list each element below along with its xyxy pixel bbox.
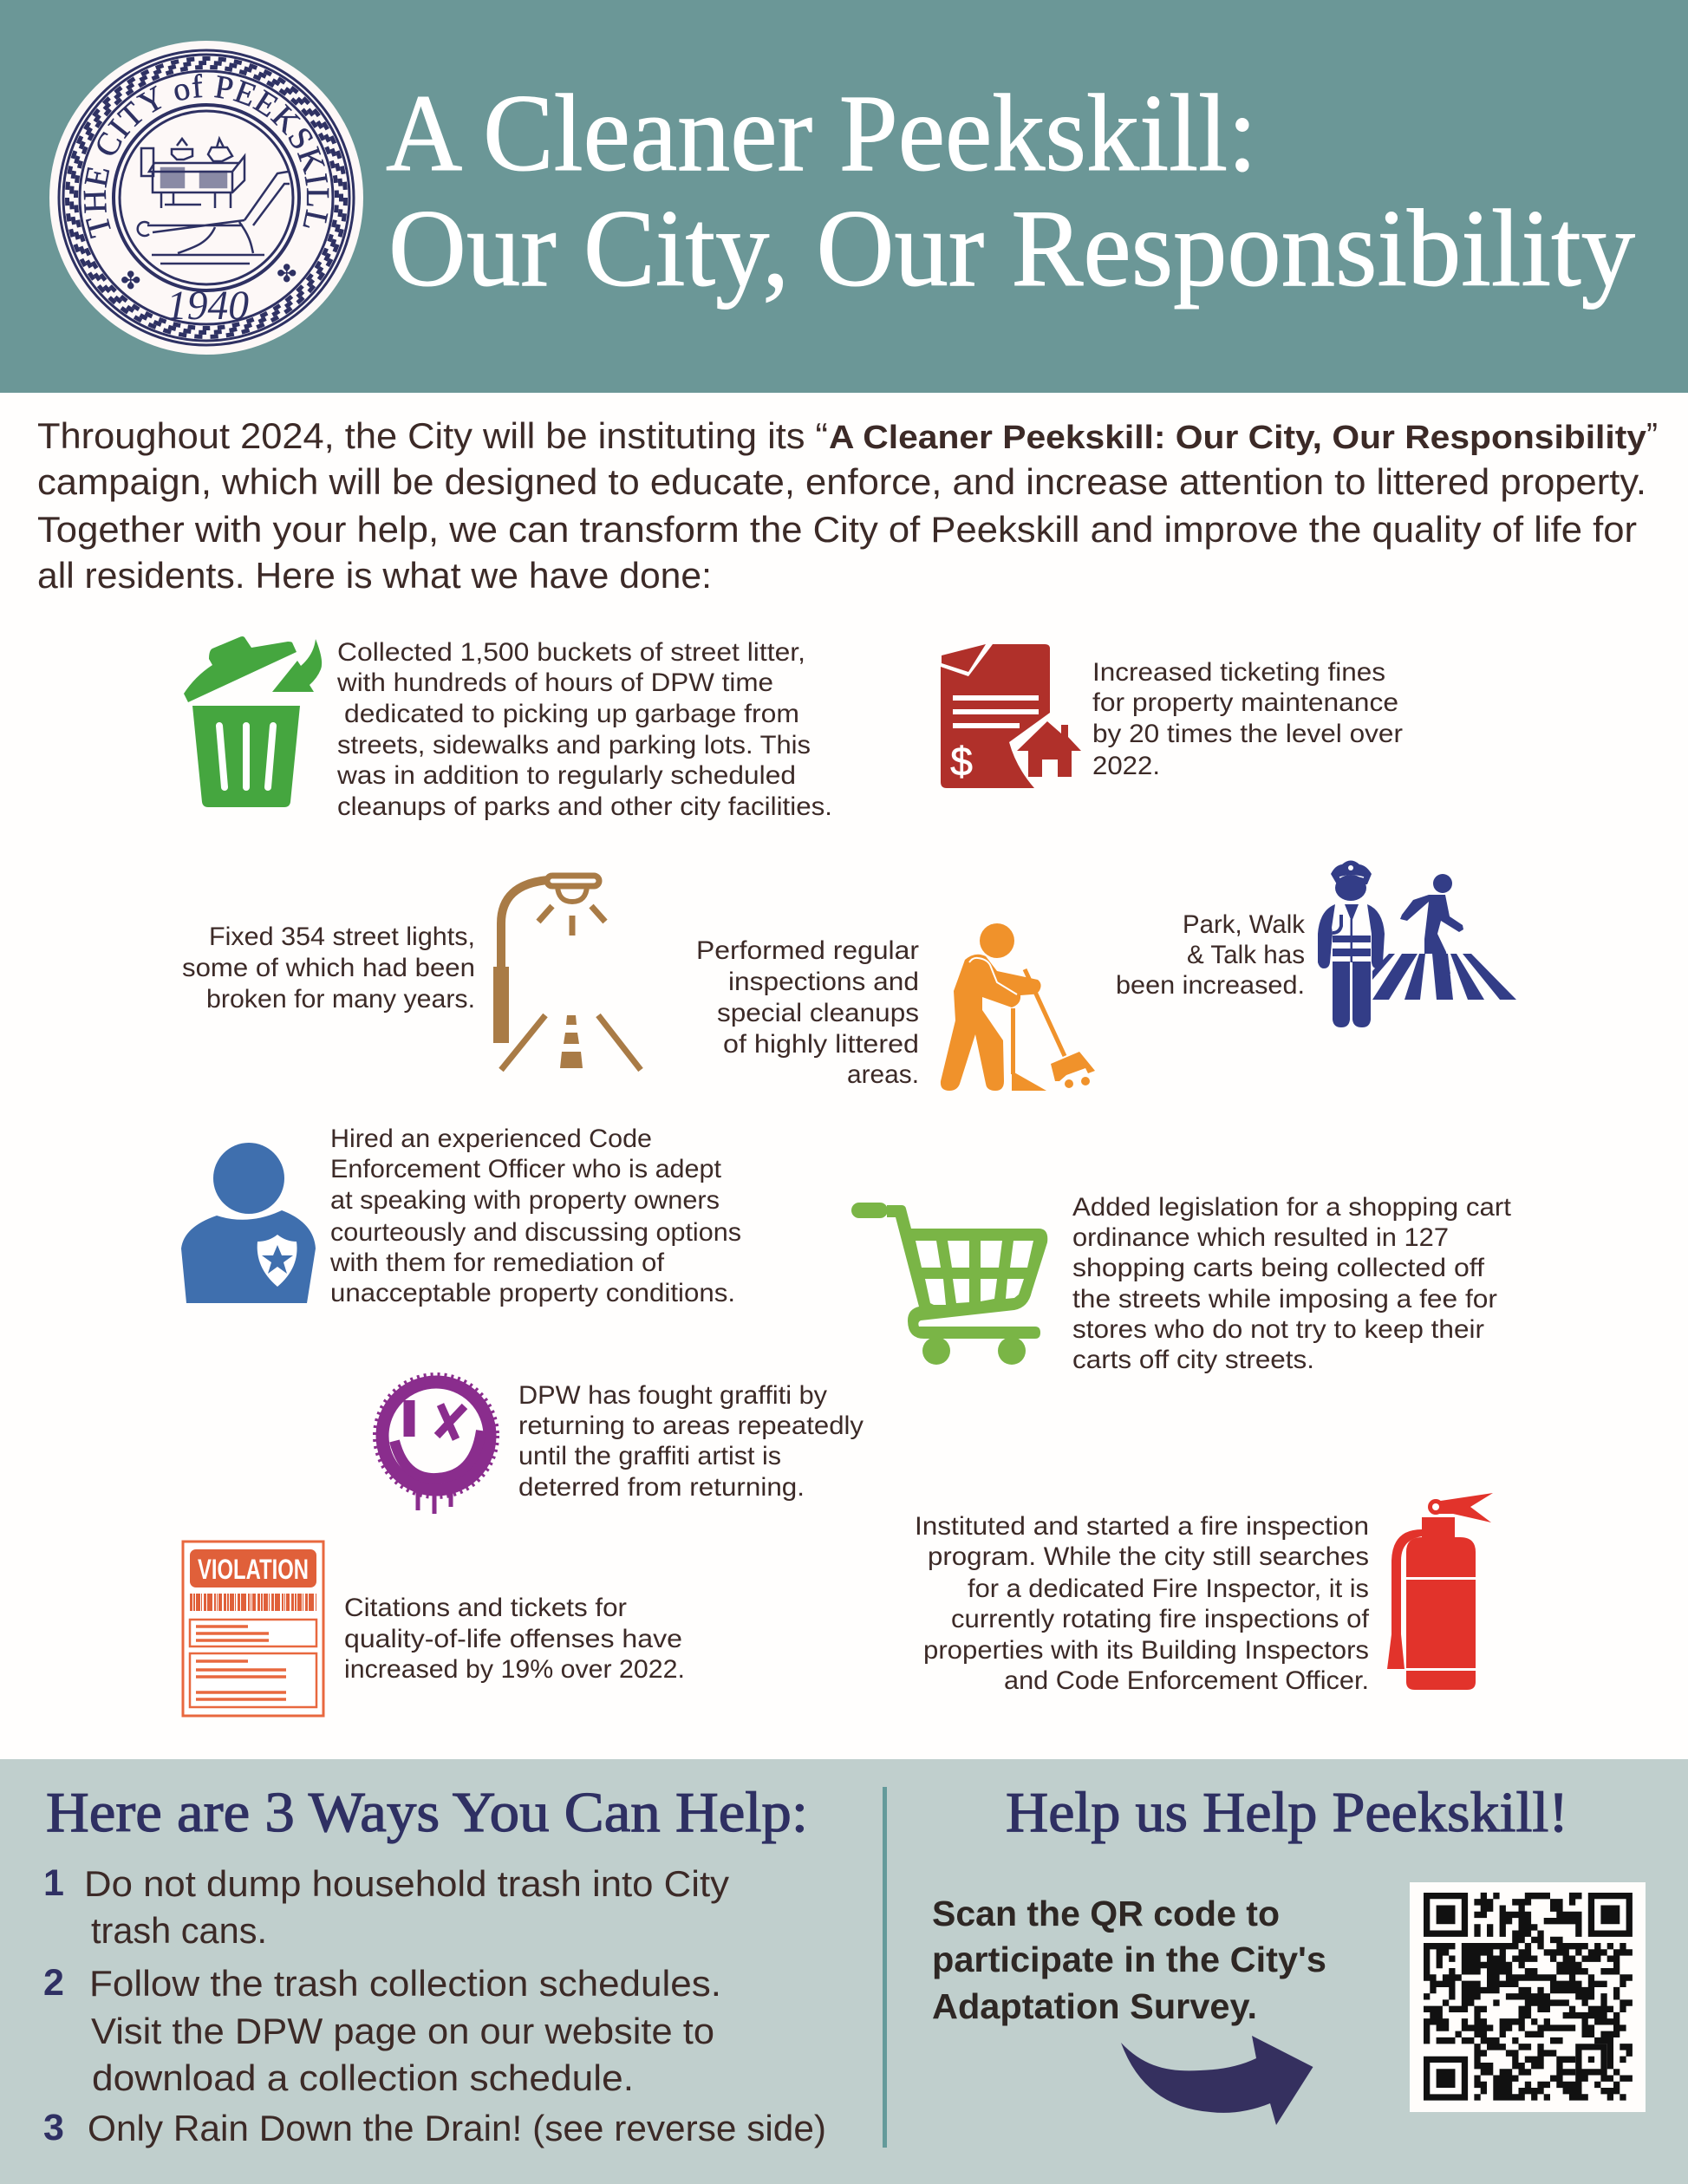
text: inspections and cleanups: of highly littered: [723, 1030, 919, 1059]
text: street litter: [336, 638, 832, 821]
text: park walk and talk: & Talk has: [1187, 941, 1305, 969]
icon: street lamp and road: [493, 876, 641, 1070]
list: ways to help: Do not dump household trash into City: [84, 1863, 729, 1904]
icon: city seal: [49, 41, 363, 355]
title: [386, 73, 1635, 310]
text: fire inspection: currently rotating fire inspections of: [951, 1605, 1370, 1633]
text: fire inspection: for a dedicated Fire Inspector, it is: [968, 1574, 1369, 1603]
icon: person sweeping: [941, 923, 1095, 1091]
text: ticketing fines: by 20 times the level over: [1092, 720, 1403, 748]
text: park walk and talk: [1116, 910, 1306, 1000]
text: street lights: broken for many years.: [206, 985, 475, 1014]
icon: police officer and crosswalk: [1318, 860, 1516, 1027]
icon: city seal: 1940: [166, 283, 249, 329]
text: scan the QR code: Adaptation Survey.: [932, 1986, 1257, 2026]
text: citations and tickets: Citations and tickets for: [344, 1594, 627, 1622]
text: graffiti: [518, 1381, 864, 1502]
text: fire inspection: properties with its Building Inspectors: [923, 1636, 1369, 1665]
text: street litter: Collected 1,500 buckets of street litter,: [337, 638, 805, 667]
icon: shopping cart: [851, 1203, 1047, 1365]
list: ways to help: Visit the DPW page on our website to: [91, 2011, 714, 2051]
text: inspections and cleanups: [696, 936, 919, 1089]
text: park walk and talk: been increased.: [1116, 971, 1305, 1000]
list: ways to help: Only Rain Down the Drain! (see reverse side): [88, 2108, 826, 2148]
text: inspections and cleanups: special cleanups: [717, 999, 919, 1027]
text: code enforcement officer: at speaking with property owners: [330, 1186, 720, 1215]
text: street litter: dedicated to picking up garbage from: [344, 700, 799, 728]
text: code enforcement officer: unacceptable property conditions.: [330, 1279, 735, 1307]
icon: fire extinguisher: [1387, 1493, 1493, 1690]
heading: help us help Peekskill: Help us Help Peekskill!: [1006, 1781, 1568, 1844]
text: inspections and cleanups: Performed regular: [696, 936, 919, 965]
icon: red fine document with house: $: [950, 739, 973, 784]
title: Our City, Our Responsibility: [388, 188, 1635, 310]
list: ways to help: 2: [43, 1962, 64, 2004]
icon: city seal: THE CITY of PEEKSKILL: [83, 74, 329, 239]
text: ticketing fines: [1092, 658, 1403, 780]
text: street litter: streets, sidewalks and parking lots. This: [337, 731, 811, 760]
text: shopping cart ordinance: Added legislation for a shopping cart: [1072, 1193, 1512, 1222]
text: graffiti: returning to areas repeatedly: [518, 1411, 864, 1440]
text: shopping cart ordinance: the streets while imposing a fee for: [1072, 1285, 1497, 1314]
list: ways to help: [43, 1862, 826, 2148]
text: street lights: [182, 922, 475, 1014]
text: inspections and cleanups: inspections and: [728, 968, 919, 996]
title: A Cleaner Peekskill:: [386, 73, 1257, 194]
list: ways to help: Follow the trash collection schedules.: [89, 1963, 721, 2004]
intro text block: campaign, which will be designed to educate, enforce, and increase attention to littered property.: [37, 461, 1646, 502]
icon: city seal: ✤: [277, 260, 297, 287]
text: fire inspection: program. While the city still searches: [928, 1542, 1369, 1571]
list: ways to help: 1: [43, 1862, 64, 1904]
icon: violation ticket: VIOLATION: [198, 1554, 309, 1585]
arrow: [1121, 2036, 1313, 2125]
heading: 3 ways you can help: Here are 3 Ways You Can Help:: [46, 1781, 808, 1844]
intro text block: ”: [1646, 415, 1658, 456]
text: ticketing fines: 2022.: [1092, 752, 1160, 780]
intro text block: A Cleaner Peekskill: Our City, Our Responsibility: [829, 420, 1646, 456]
panel: header banner: [0, 0, 1688, 393]
list: ways to help: 3: [43, 2107, 64, 2148]
icon: red fine document with house: [941, 644, 1081, 788]
text: graffiti: DPW has fought graffiti by: [518, 1381, 827, 1410]
text: street litter: cleanups of parks and other city facilities.: [337, 792, 832, 821]
text: code enforcement officer: [329, 1125, 741, 1307]
text: code enforcement officer: Hired an experienced Code: [330, 1125, 652, 1153]
text: fire inspection: and Code Enforcement Officer.: [1004, 1666, 1369, 1695]
text: fire inspection: [915, 1512, 1370, 1695]
text: graffiti: until the graffiti artist is: [518, 1442, 781, 1470]
intro text block: Together with your help, we can transform the City of Peekskill and improve the quality of life for: [37, 509, 1637, 550]
list: ways to help: trash cans.: [91, 1910, 267, 1951]
text: shopping cart ordinance: [1072, 1193, 1512, 1374]
intro text block: all residents. Here is what we have done:: [37, 555, 712, 596]
text: code enforcement officer: courteously and discussing options: [330, 1218, 741, 1247]
text: citations and tickets: quality-of-life offenses have: [344, 1625, 682, 1653]
intro text block: Throughout 2024, the City will be instituting its “: [37, 415, 828, 456]
text: graffiti: deterred from returning.: [518, 1473, 805, 1502]
text: code enforcement officer: Enforcement Officer who is adept: [330, 1155, 722, 1183]
icon: stove and plow drawing: [138, 139, 290, 264]
text: fire inspection: Instituted and started a fire inspection: [915, 1512, 1369, 1541]
list: ways to help: download a collection schedule.: [92, 2057, 634, 2098]
icon: violation ticket: [183, 1542, 323, 1716]
text: inspections and cleanups: areas.: [847, 1060, 919, 1089]
text: shopping cart ordinance: ordinance which resulted in 127: [1072, 1223, 1449, 1252]
icon: city seal: ✤: [121, 267, 140, 294]
QR code: [1410, 1882, 1646, 2112]
text: street lights: Fixed 354 street lights,: [209, 922, 475, 951]
text: street lights: some of which had been: [182, 954, 475, 982]
text: scan the QR code: [932, 1894, 1326, 2026]
text: park walk and talk: Park, Walk: [1183, 910, 1306, 939]
icon: code enforcement officer: [181, 1143, 316, 1303]
text: street litter: with hundreds of hours of DPW time: [336, 668, 773, 697]
text: scan the QR code: Scan the QR code to: [932, 1894, 1280, 1933]
intro text block: [37, 415, 1658, 596]
text: scan the QR code: participate in the City's: [932, 1940, 1326, 1979]
text: citations and tickets: increased by 19% over 2022.: [344, 1655, 685, 1684]
text: shopping cart ordinance: stores who do not try to keep their: [1072, 1315, 1484, 1344]
text: code enforcement officer: with them for remediation of: [329, 1248, 665, 1277]
text: shopping cart ordinance: shopping carts being collected off: [1072, 1254, 1485, 1282]
text: citations and tickets: [344, 1594, 685, 1684]
icon: graffiti smiley: [375, 1374, 498, 1514]
text: ticketing fines: Increased ticketing fines: [1092, 658, 1385, 687]
text: street litter: was in addition to regularly scheduled: [336, 761, 796, 790]
icon: green trash can: [184, 636, 322, 807]
text: ticketing fines: for property maintenance: [1092, 688, 1398, 717]
text: shopping cart ordinance: carts off city streets.: [1072, 1346, 1314, 1374]
panel: footer: [0, 1759, 1688, 2184]
